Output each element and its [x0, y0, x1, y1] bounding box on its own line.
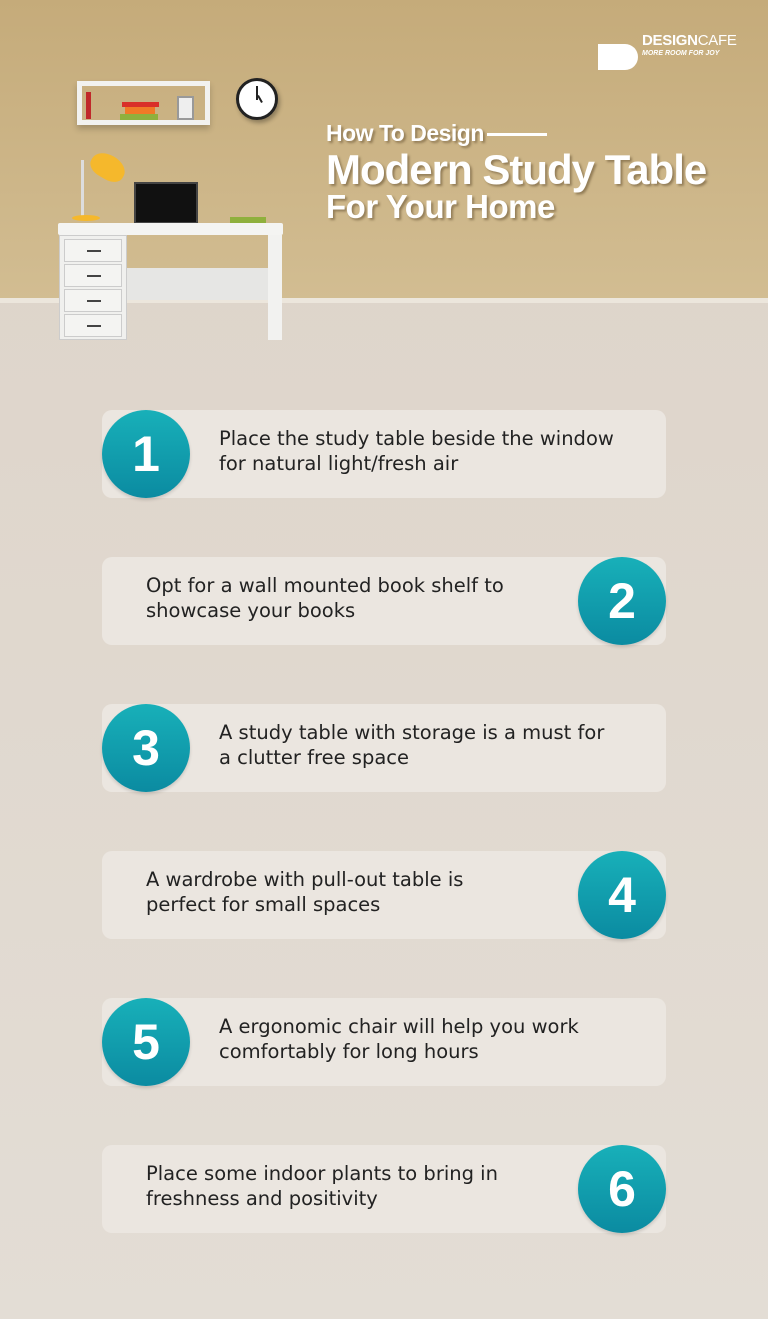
card 4: 4 — [608, 867, 636, 923]
card 1: Place the study table beside the window — [219, 427, 614, 450]
illustration: desk — [58, 153, 283, 340]
card 3: 3 — [132, 720, 160, 776]
card 6: Place some indoor plants to bring in — [146, 1162, 498, 1185]
title: Modern Study Table — [326, 146, 706, 193]
title: How To Design — [326, 120, 484, 146]
card 5: A ergonomic chair will help you work — [219, 1015, 579, 1038]
card 1 — [102, 410, 666, 498]
card 5: comfortably for long hours — [219, 1040, 479, 1063]
card 4 — [102, 851, 666, 939]
logo — [598, 32, 737, 70]
card 2 — [102, 557, 666, 645]
card 2: showcase your books — [146, 599, 355, 622]
card 5 — [102, 998, 666, 1086]
card 4: A wardrobe with pull-out table is — [146, 868, 463, 891]
card 2: Opt for a wall mounted book shelf to — [146, 574, 504, 597]
card 1: 1 — [132, 426, 160, 482]
card 5: 5 — [132, 1014, 160, 1070]
card 6 — [102, 1145, 666, 1233]
icon: clock — [236, 78, 278, 120]
wall background — [0, 0, 768, 300]
card 1: for natural light/fresh air — [219, 452, 458, 475]
title — [326, 120, 709, 225]
icon: logo mark — [598, 44, 638, 70]
card 6: freshness and positivity — [146, 1187, 378, 1210]
card 3: A study table with storage is a must for — [219, 721, 604, 744]
logo: MORE ROOM FOR JOY — [642, 50, 719, 57]
card 3 — [102, 704, 666, 792]
card 4: perfect for small spaces — [146, 893, 380, 916]
card 3: a clutter free space — [219, 746, 409, 769]
title: For Your Home — [326, 188, 555, 225]
card 6: 6 — [608, 1161, 636, 1217]
illustration: shelf — [77, 81, 210, 125]
text: DESIGNCAFE — [642, 32, 737, 49]
card 2: 2 — [608, 573, 636, 629]
